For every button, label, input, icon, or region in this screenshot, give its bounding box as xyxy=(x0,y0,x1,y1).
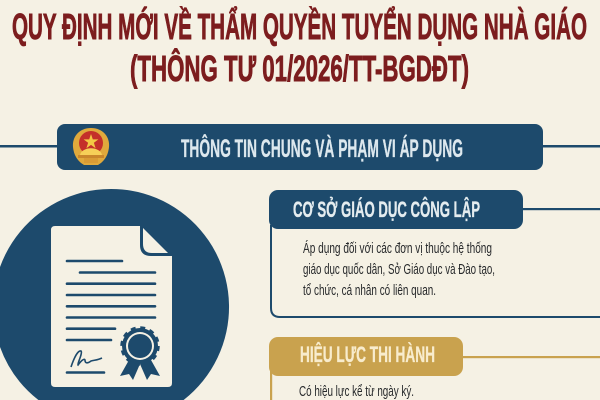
title xyxy=(12,5,587,89)
icon: national emblem xyxy=(73,128,109,165)
panel: public education institutions xyxy=(269,190,600,317)
panel body text xyxy=(303,240,495,299)
panel heading: CƠ SỞ GIÁO DỤC CÔNG LẬP xyxy=(293,197,480,222)
panel body text: Có hiệu lực kể từ ngày ký. xyxy=(299,383,414,400)
panel body text: giáo dục quốc dân, Sở Giáo dục và Đào tạo, xyxy=(303,261,495,278)
panel heading: HIỆU LỰC THI HÀNH xyxy=(300,342,435,367)
panel body text: tổ chức, cá nhân có liên quan. xyxy=(303,282,436,299)
section banner xyxy=(0,124,600,170)
icon: document with seal in circle xyxy=(0,189,229,400)
panel body text: Áp dụng đối với các đơn vị thuộc hệ thống xyxy=(303,240,492,257)
panel: effective date xyxy=(269,337,600,400)
